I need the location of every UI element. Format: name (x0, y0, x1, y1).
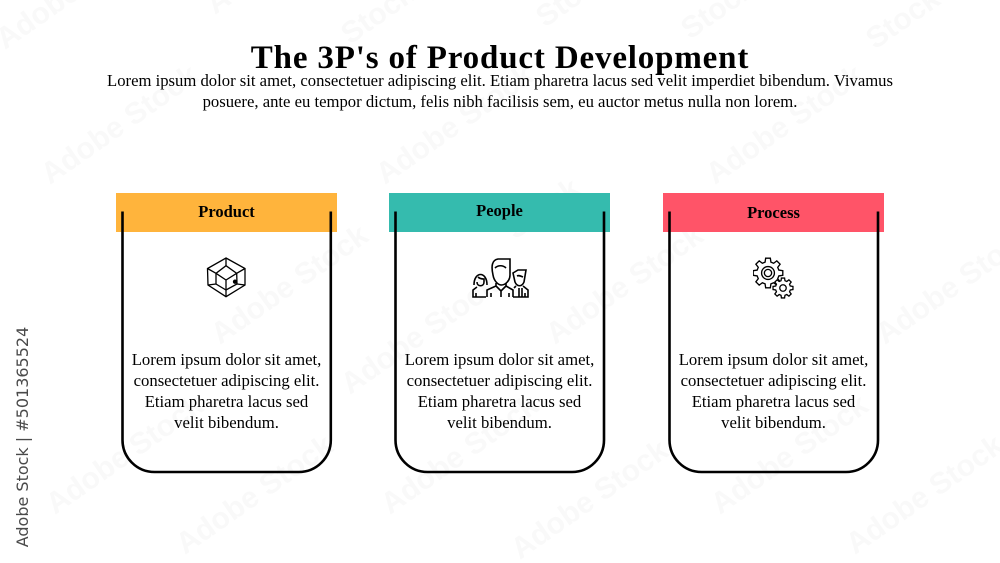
card outline: process (668, 212, 880, 474)
stock id side label: Adobe Stock | #501365524 (13, 327, 32, 547)
panel: people (389, 193, 610, 474)
watermark pattern: Stock (500, 172, 586, 246)
title: The 3P's of Product Development (251, 40, 749, 76)
body text: product: Etiam pharetra lacus sed (145, 392, 308, 411)
card outline: product (121, 212, 332, 474)
watermark pattern: Adobe Stock (40, 388, 209, 521)
body text: product: Lorem ipsum dolor sit amet, (132, 350, 321, 369)
intro text (107, 71, 893, 111)
label: people: People (476, 200, 523, 220)
icon: people group (472, 258, 529, 298)
watermark pattern: Adobe Stock (170, 428, 339, 561)
watermark pattern: Adobe Stock (700, 58, 869, 191)
header bar: process (663, 193, 884, 232)
watermark pattern: Adobe Stock (205, 218, 374, 351)
watermark pattern: Adobe Stock (370, 58, 539, 191)
body text: process: Lorem ipsum dolor sit amet, (679, 350, 868, 369)
body text: people: Etiam pharetra lacus sed (418, 392, 581, 411)
watermark pattern: Adobe Stock (505, 433, 674, 563)
icon: cube (206, 257, 246, 298)
panel: product (116, 193, 337, 474)
body text: product: consectetuer adipiscing elit. (134, 371, 319, 390)
header bar: people (389, 193, 610, 232)
label: process: Process (747, 203, 800, 222)
panel: process (663, 193, 884, 474)
header bar: product (116, 193, 337, 232)
body text: process: velit bibendum. (721, 413, 826, 432)
body text: product (132, 350, 321, 432)
watermark pattern: Adobe Stock (35, 58, 204, 191)
intro text: posuere, ante eu tempor dictum, felis nibh facilisis sem, eu auctor metus nulla non lorem. (203, 92, 797, 111)
body text: process (679, 350, 868, 432)
body text: people (405, 350, 594, 432)
watermark pattern: Adobe Stock (335, 268, 504, 401)
body text: process: consectetuer adipiscing elit. (681, 371, 866, 390)
body text: product: velit bibendum. (174, 413, 279, 432)
body text: process: Etiam pharetra lacus sed (692, 392, 855, 411)
body text: people: Lorem ipsum dolor sit amet, (405, 350, 594, 369)
watermark pattern: Adobe Stock (540, 218, 709, 351)
card outline: people (394, 212, 606, 474)
intro text: Lorem ipsum dolor sit amet, consectetuer adipiscing elit. Etiam pharetra lacus sed velit imperdiet bibendum. Vivamus (107, 71, 893, 90)
body text: people: consectetuer adipiscing elit. (407, 371, 592, 390)
label: product: Product (198, 202, 255, 220)
watermark pattern: Adobe Stock (375, 388, 544, 521)
body text: people: velit bibendum. (447, 413, 552, 432)
icon: gears (753, 258, 794, 299)
watermark pattern: Adobe Stock (705, 388, 874, 521)
